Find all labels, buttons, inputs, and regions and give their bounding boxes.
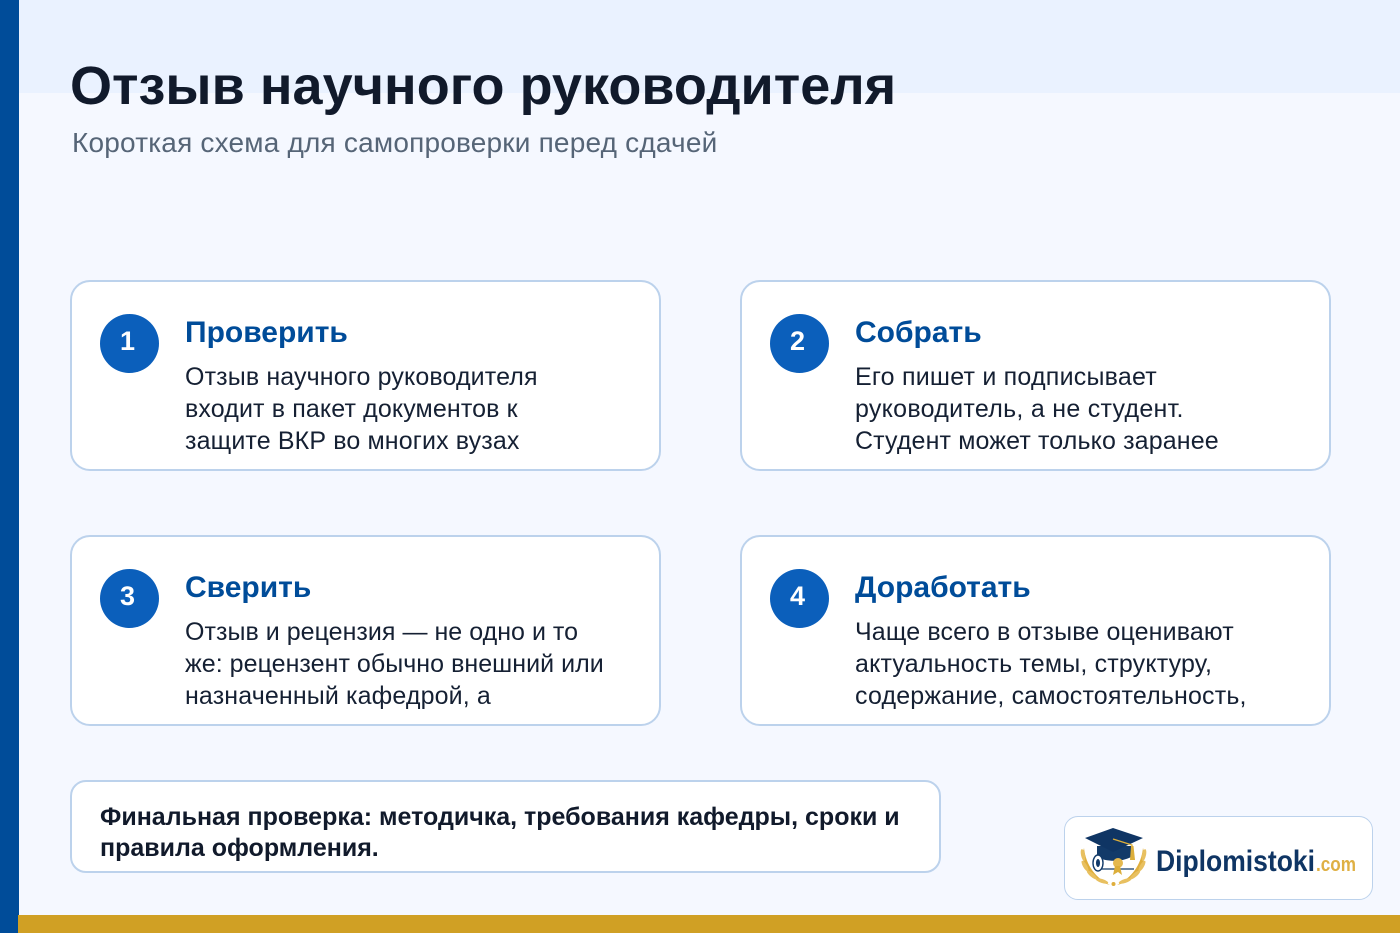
- step 2 text: Студент может только заранее: [855, 427, 1219, 455]
- step 3 text: же: рецензент обычно внешний или: [185, 650, 604, 678]
- step 3 text: [185, 618, 604, 710]
- step 2 text: руководитель, а не студент.: [855, 395, 1184, 423]
- left accent bar: [0, 0, 19, 933]
- step number 3: 3: [120, 581, 135, 611]
- final check text: Финальная проверка: методичка, требования кафедры, сроки и: [100, 803, 900, 831]
- header band: [18, 0, 1400, 93]
- step 4 text: актуальность темы, структуру,: [855, 650, 1212, 678]
- step 3 heading: Сверить: [185, 571, 311, 604]
- step 2 heading: Собрать: [855, 316, 982, 349]
- logo domain: .com: [1316, 854, 1356, 876]
- step number 1: [100, 314, 159, 373]
- step number 1: 1: [120, 326, 135, 356]
- step 2 text: [855, 363, 1219, 455]
- icon: graduation cap with laurel: [1080, 828, 1147, 886]
- step 1 text: [185, 363, 538, 455]
- step 1 heading: Проверить: [185, 316, 348, 349]
- step 3 text: Отзыв и рецензия — не одно и то: [185, 618, 578, 646]
- title: Отзыв научного руководителя: [70, 56, 896, 116]
- step number 2: [770, 314, 829, 373]
- subtitle: Короткая схема для самопроверки перед сдачей: [72, 127, 717, 158]
- step 4 text: содержание, самостоятельность,: [855, 682, 1247, 710]
- panel: step 1: [70, 280, 661, 471]
- step 1 text: входит в пакет документов к: [185, 395, 518, 423]
- final check text: правила оформления.: [100, 834, 379, 862]
- step 1 text: защите ВКР во многих вузах: [185, 427, 520, 455]
- step number 4: 4: [790, 581, 805, 611]
- step number 4: [770, 569, 829, 628]
- panel: step 4: [740, 535, 1331, 726]
- step number 3: [100, 569, 159, 628]
- step 1 text: Отзыв научного руководителя: [185, 363, 538, 391]
- logo: [1080, 828, 1356, 886]
- step 4 text: Чаще всего в отзыве оценивают: [855, 618, 1234, 646]
- logo wordmark: Diplomistoki: [1156, 845, 1315, 878]
- bottom gold bar: [18, 915, 1400, 933]
- logo card: [1064, 816, 1373, 900]
- final check text: [100, 803, 900, 862]
- panel: step 2: [740, 280, 1331, 471]
- callout: final check: [70, 780, 941, 873]
- step 4 text: [855, 618, 1247, 710]
- step 3 text: назначенный кафедрой, а: [185, 682, 491, 710]
- panel: step 3: [70, 535, 661, 726]
- step number 2: 2: [790, 326, 805, 356]
- step 2 text: Его пишет и подписывает: [855, 363, 1157, 391]
- step 4 heading: Доработать: [855, 571, 1031, 604]
